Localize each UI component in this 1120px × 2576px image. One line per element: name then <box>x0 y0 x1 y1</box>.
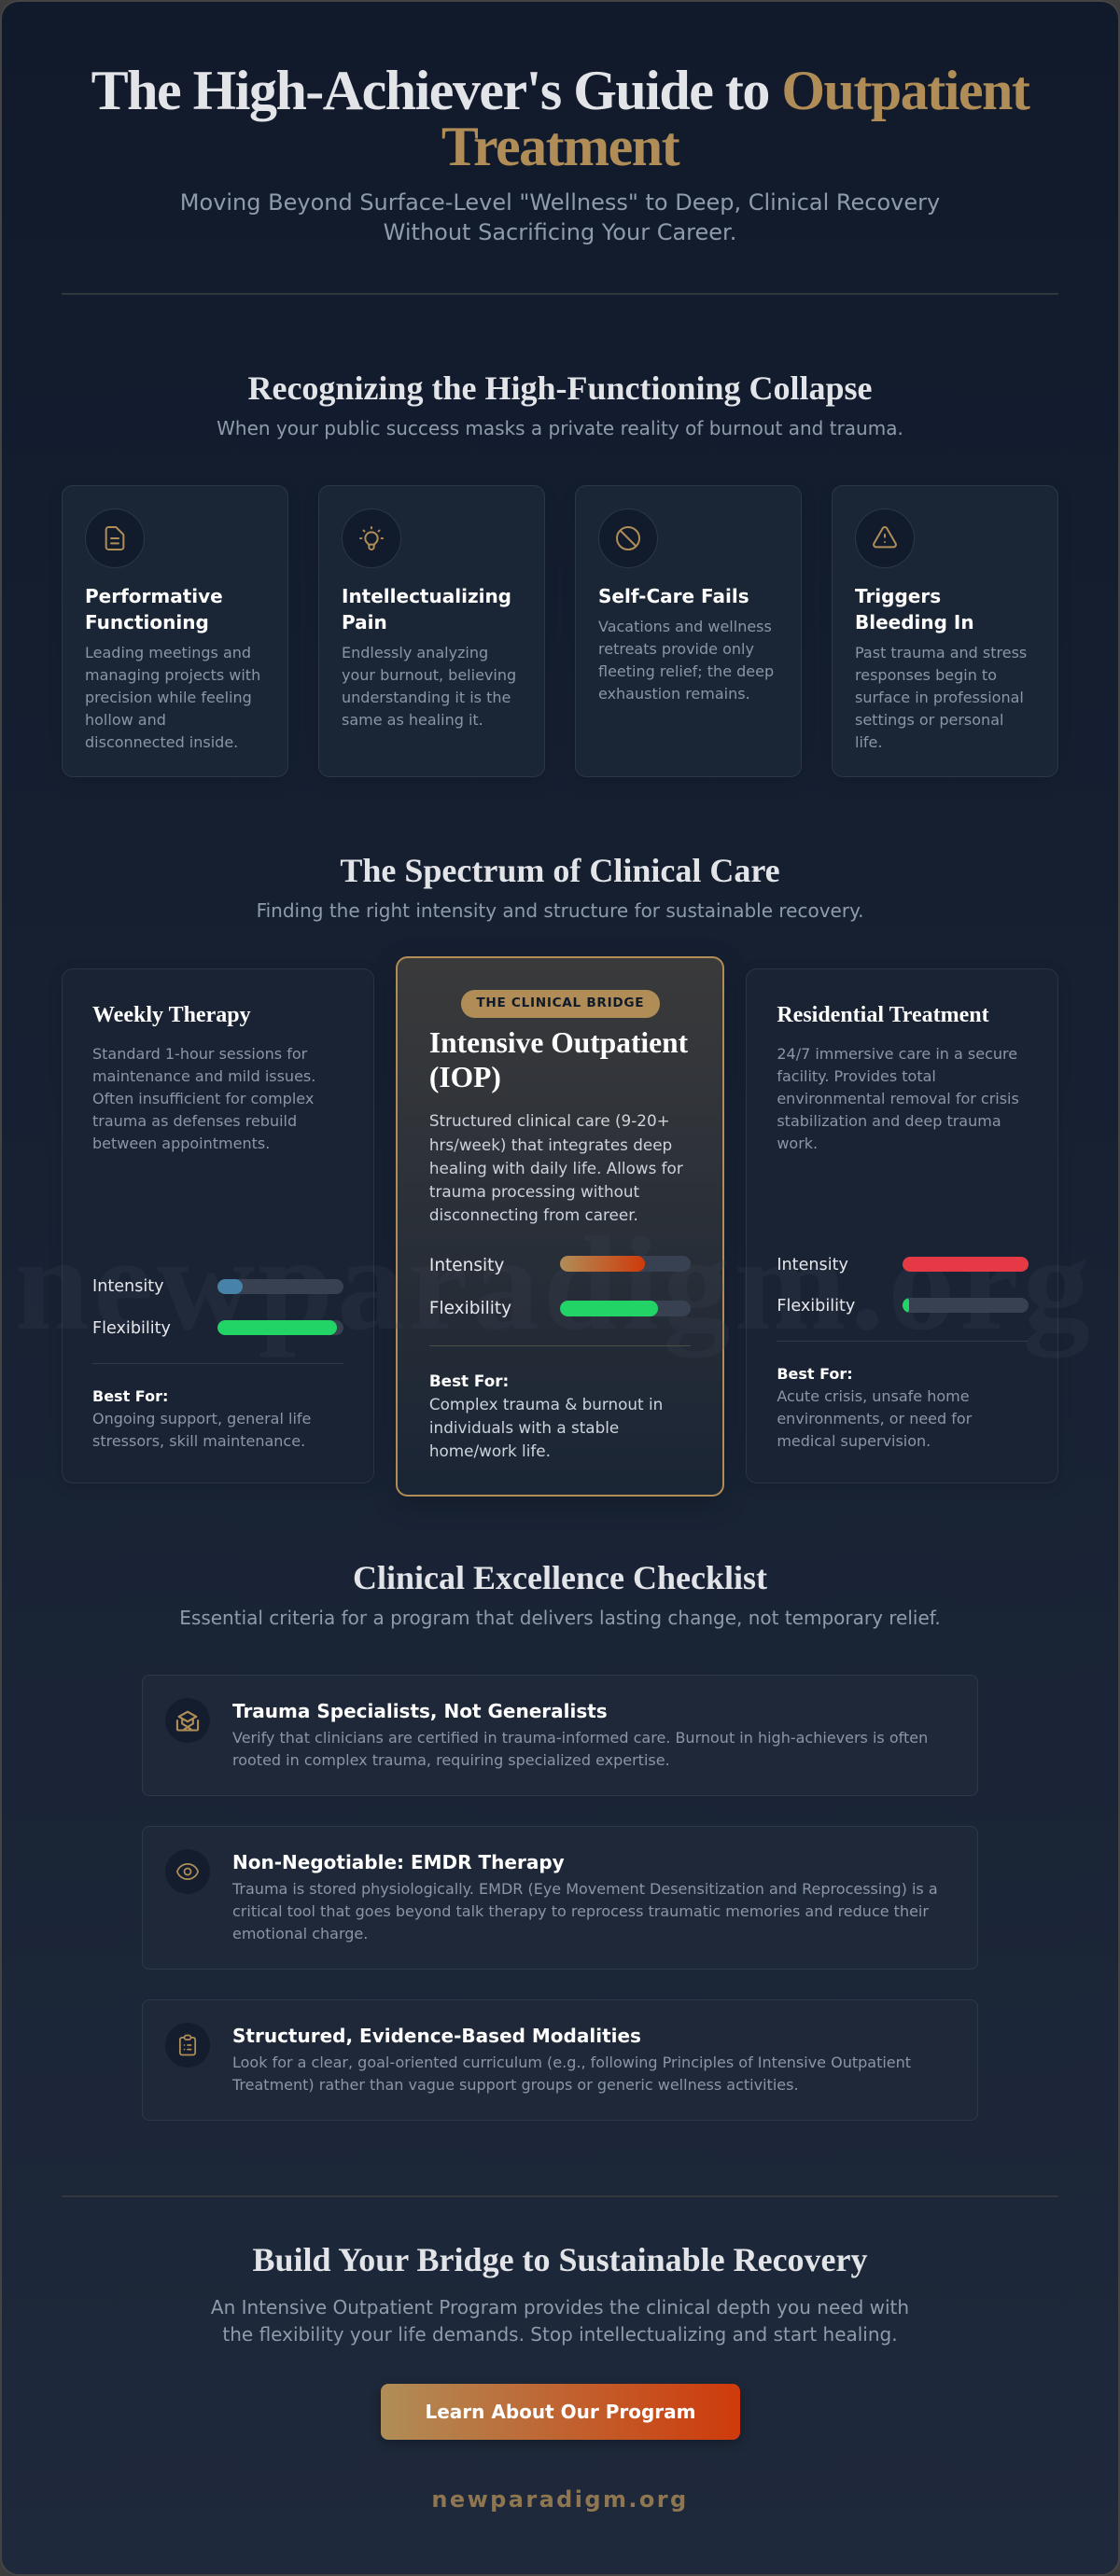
card title: Triggers <box>855 585 941 607</box>
best for: Best For: <box>777 1365 853 1383</box>
item text: Look for a clear, goal-oriented curriculum (e.g., following Principles of Intensive Outpatient <box>232 2054 911 2071</box>
call to action text <box>211 2296 909 2346</box>
option description: trauma as defenses rebuild <box>92 1112 297 1130</box>
card title: Intellectualizing <box>342 585 511 607</box>
best for: individuals with a stable <box>429 1418 619 1437</box>
subheading: recognizing: When your public success masks a private reality of burnout and trauma. <box>217 417 903 439</box>
item title: Structured, Evidence-Based Modalities <box>232 2025 641 2047</box>
panel: weekly therapy <box>62 968 374 1483</box>
flexibility bar <box>903 1298 1029 1313</box>
best for: Ongoing support, general life <box>92 1410 311 1427</box>
option title <box>429 1026 688 1093</box>
option description: facility. Provides total <box>777 1067 936 1085</box>
option description: 24/7 immersive care in a secure <box>777 1045 1017 1063</box>
flexibility bar <box>217 1320 343 1335</box>
option description: between appointments. <box>92 1135 270 1152</box>
best for <box>429 1372 663 1460</box>
watermark: newparadigm.org <box>15 1210 1094 1358</box>
card text <box>855 644 1027 751</box>
card text: retreats provide only <box>598 640 754 658</box>
panel: intensive outpatient highlighted <box>396 956 724 1497</box>
option description: hrs/week) that integrates deep <box>429 1135 672 1154</box>
card title <box>342 585 511 634</box>
option title: Weekly Therapy <box>92 1003 251 1027</box>
title <box>91 60 1030 177</box>
icon: ban <box>598 508 658 568</box>
icon: warning triangle <box>855 508 915 568</box>
card text: understanding it is the <box>342 689 511 706</box>
checklist item: trauma specialists <box>142 1675 978 1796</box>
card title: Performative <box>85 585 223 607</box>
checklist item: EMDR <box>142 1826 978 1970</box>
flexibility label: Flexibility <box>429 1299 511 1318</box>
button: Learn About Our Program <box>425 2401 696 2423</box>
icon: academic cap <box>165 1698 210 1743</box>
option description: Standard 1-hour sessions for <box>92 1045 307 1063</box>
intensity label: Intensity <box>777 1256 848 1274</box>
intensity label: Intensity <box>92 1277 164 1296</box>
flexibility label: Flexibility <box>92 1319 171 1338</box>
panel: self-care fails <box>575 485 802 777</box>
best for: home/work life. <box>429 1441 551 1460</box>
subtitle <box>180 189 940 245</box>
best for: Acute crisis, unsafe home <box>777 1387 970 1405</box>
panel: triggers bleeding in <box>832 485 1058 777</box>
item text: Trauma is stored physiologically. EMDR (Eye Movement Desensitization and Reprocessing) is a <box>232 1880 938 1898</box>
card text: settings or personal <box>855 711 1003 729</box>
option description: environmental removal for crisis <box>777 1090 1019 1107</box>
card text <box>85 644 260 751</box>
best for: environments, or need for <box>777 1410 972 1427</box>
icon: light bulb <box>342 508 401 568</box>
item text: Treatment) rather than vague support groups or generic wellness activities. <box>232 2076 799 2094</box>
option title: (IOP) <box>429 1061 501 1093</box>
badge <box>461 990 660 1018</box>
footer brand: newparadigm.org <box>431 2486 689 2513</box>
option description <box>777 1045 1019 1152</box>
item text <box>232 1729 928 1769</box>
item text: emotional charge. <box>232 1925 368 1942</box>
intensity label: Intensity <box>429 1256 504 1275</box>
card title: Pain <box>342 611 387 634</box>
best for <box>92 1387 311 1450</box>
badge: THE CLINICAL BRIDGE <box>476 996 644 1010</box>
option description: stabilization and deep trauma <box>777 1112 1001 1130</box>
card text: Leading meetings and <box>85 644 251 661</box>
card text: Vacations and wellness <box>598 618 772 635</box>
card title: Self-Care Fails <box>598 585 749 607</box>
card text: Endlessly analyzing <box>342 644 488 661</box>
card text: disconnected inside. <box>85 733 238 751</box>
option title: Intensive Outpatient <box>429 1026 688 1059</box>
option title: Residential Treatment <box>777 1003 989 1027</box>
card text <box>598 618 774 703</box>
item text <box>231 2054 911 2094</box>
panel: intellectualizing pain <box>318 485 545 777</box>
panel: performative functioning <box>62 485 288 777</box>
intensity bar <box>217 1279 343 1294</box>
option description: work. <box>777 1135 818 1152</box>
card text <box>342 644 516 729</box>
heading: call to action: Build Your Bridge to Sustainable Recovery <box>252 2241 868 2278</box>
heading: spectrum of care: The Spectrum of Clinical Care <box>340 852 780 889</box>
card text: exhaustion remains. <box>598 685 750 703</box>
icon: eye <box>165 1849 210 1894</box>
call to action text: An Intensive Outpatient Program provides the clinical depth you need with <box>211 2296 909 2318</box>
card title <box>855 585 974 634</box>
card text: life. <box>855 733 882 751</box>
title: Treatment <box>441 116 679 177</box>
flexibility bar <box>560 1301 691 1316</box>
card title <box>85 585 223 634</box>
subheading: spectrum: Finding the right intensity and structure for sustainable recovery. <box>257 899 863 922</box>
item text: rooted in complex trauma, requiring specialized expertise. <box>232 1751 670 1769</box>
card text: hollow and <box>85 711 166 729</box>
icon: document <box>85 508 145 568</box>
option description: healing with daily life. Allows for <box>429 1159 683 1177</box>
item text: Verify that clinicians are certified in trauma-informed care. Burnout in high-achievers is often <box>232 1729 928 1747</box>
best for: Best For: <box>92 1387 168 1405</box>
item text: critical tool that goes beyond talk therapy to reprocess traumatic memories and reduce their <box>232 1902 929 1920</box>
icon: clipboard list <box>165 2023 210 2068</box>
checklist item: structured modalities <box>142 1999 978 2121</box>
card text: surface in professional <box>855 689 1024 706</box>
card title: Bleeding In <box>855 611 974 634</box>
intensity bar <box>560 1256 691 1272</box>
item title: Trauma Specialists, Not Generalists <box>232 1700 608 1722</box>
title: The High-Achiever's Guide to Outpatient <box>91 60 1029 121</box>
subtitle: Moving Beyond Surface-Level "Wellness" to Deep, Clinical Recovery <box>180 189 940 216</box>
card text: Past trauma and stress <box>855 644 1027 661</box>
best for: Complex trauma & burnout in <box>429 1395 663 1413</box>
option description <box>92 1045 315 1152</box>
option description <box>429 1111 683 1224</box>
card text: your burnout, believing <box>342 666 516 684</box>
card text: managing projects with <box>85 666 260 684</box>
card text: responses begin to <box>855 666 997 684</box>
button <box>381 2384 740 2440</box>
subtitle: Without Sacrificing Your Career. <box>384 219 736 245</box>
heading: checklist: Clinical Excellence Checklist <box>353 1559 767 1596</box>
flexibility label: Flexibility <box>777 1297 855 1316</box>
option description: disconnecting from career. <box>429 1205 638 1224</box>
card text: fleeting relief; the deep <box>598 662 774 680</box>
heading: recognizing the collapse: Recognizing the High-Functioning Collapse <box>247 369 873 407</box>
option description: Often insufficient for complex <box>92 1090 314 1107</box>
option description: maintenance and mild issues. <box>92 1067 315 1085</box>
subheading: checklist: Essential criteria for a program that delivers lasting change, not temporary relief. <box>179 1607 941 1629</box>
item title: Non-Negotiable: EMDR Therapy <box>232 1851 565 1873</box>
best for <box>777 1365 973 1450</box>
panel: residential treatment <box>746 968 1058 1483</box>
card title: Functioning <box>85 611 209 634</box>
best for: medical supervision. <box>777 1432 931 1450</box>
card text: precision while feeling <box>85 689 252 706</box>
intensity bar <box>903 1257 1029 1272</box>
best for: stressors, skill maintenance. <box>92 1432 305 1450</box>
best for: Best For: <box>429 1372 509 1390</box>
call to action text: the flexibility your life demands. Stop intellectualizing and start healing. <box>222 2323 898 2346</box>
card text: same as healing it. <box>342 711 483 729</box>
option description: Structured clinical care (9-20+ <box>429 1111 670 1130</box>
option description: trauma processing without <box>429 1182 639 1201</box>
item text <box>231 1880 938 1942</box>
